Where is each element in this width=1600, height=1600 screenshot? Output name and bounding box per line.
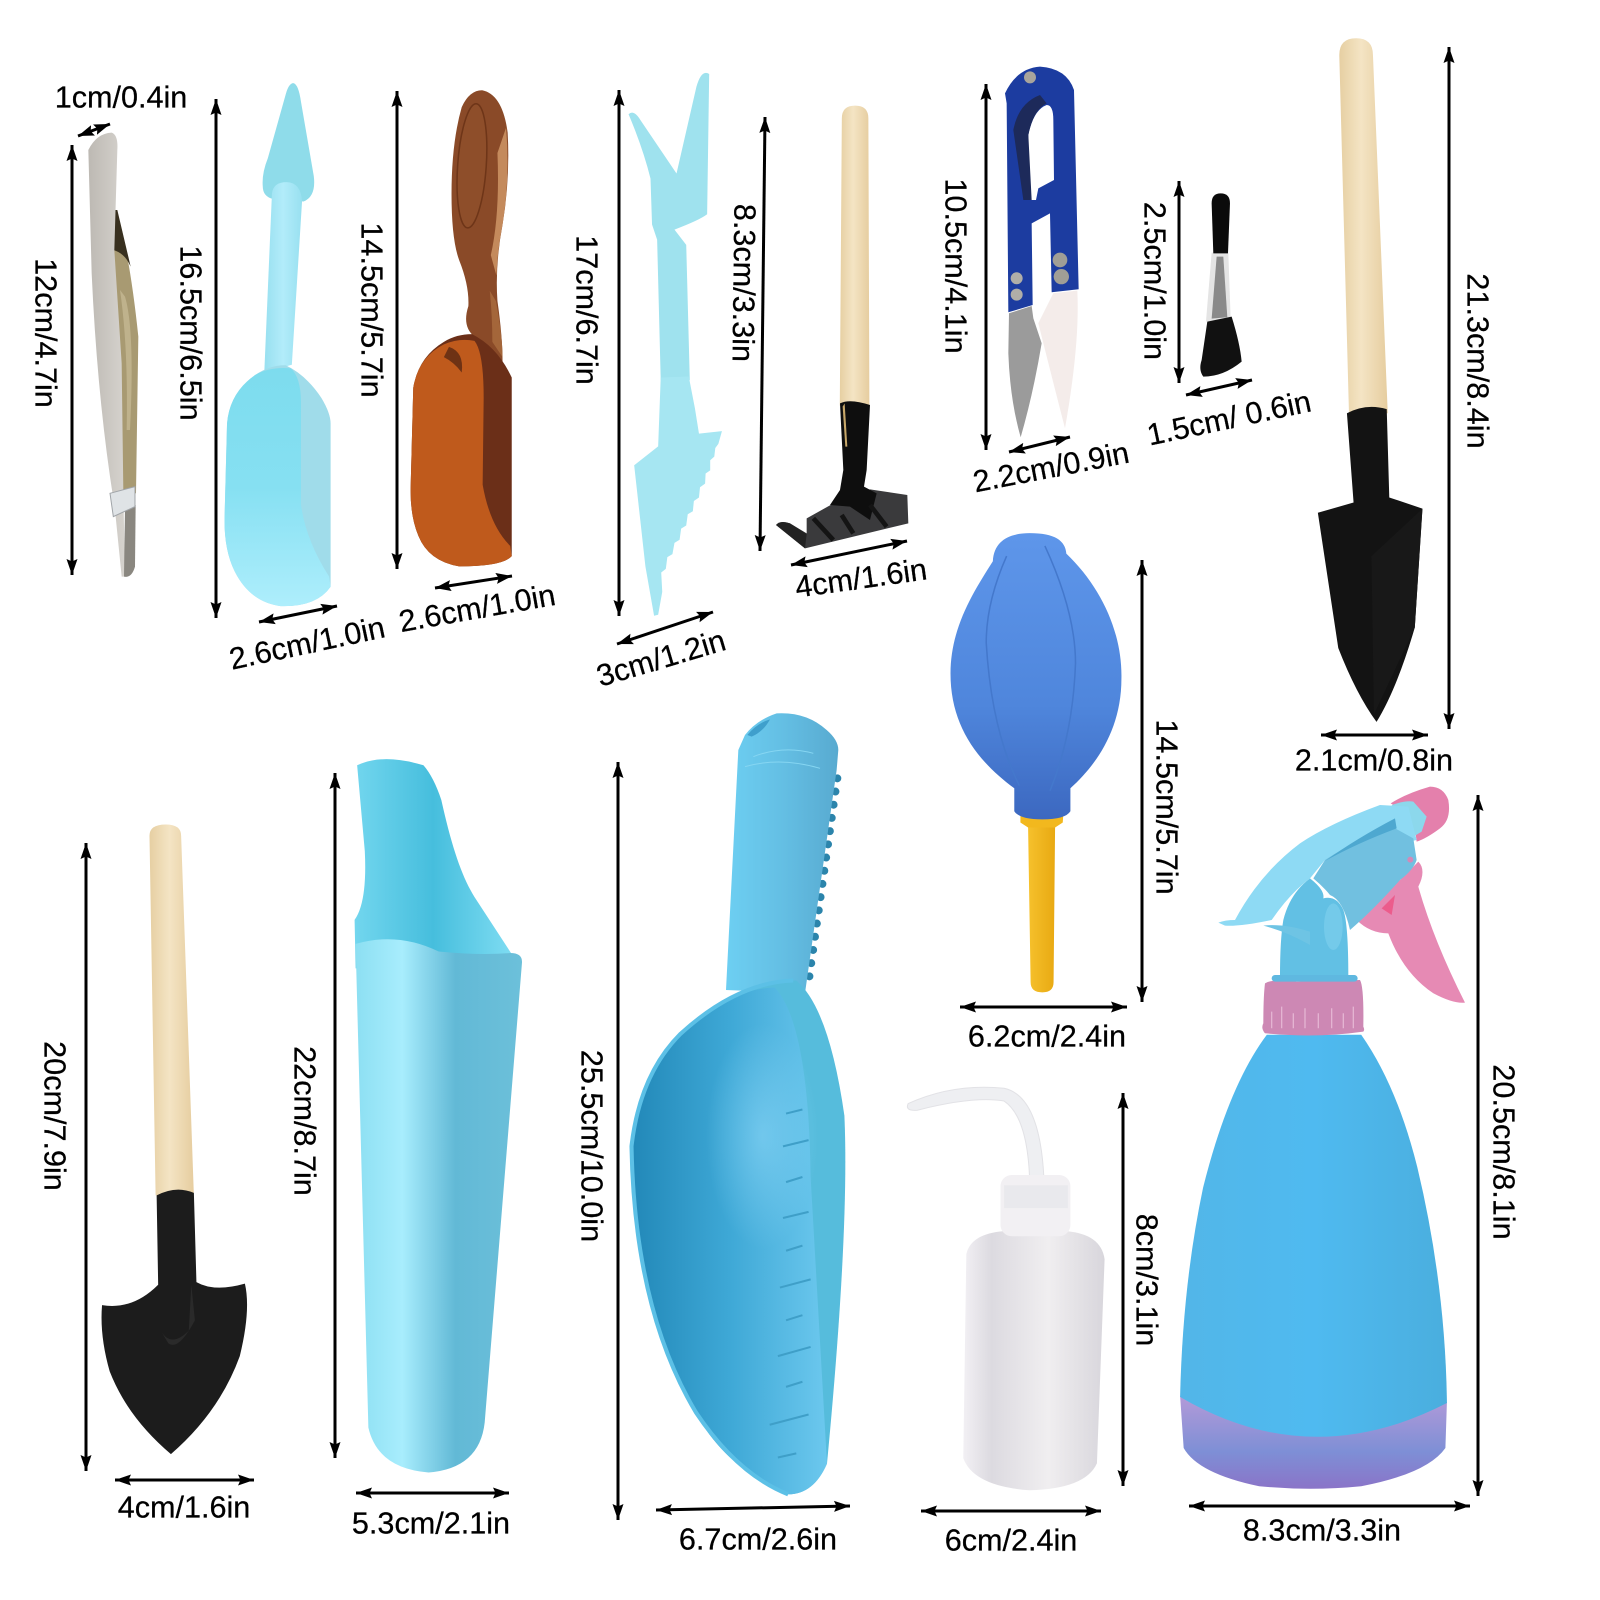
dimension: width 6.7cm <box>656 1506 850 1556</box>
dimension: width 8.3cm: 8.3cm/3.3in <box>1243 1514 1401 1548</box>
dimension: height 14.5cm: 14.5cm/5.7in <box>1150 719 1184 895</box>
panel: snips <box>938 67 1132 499</box>
panel: tall blue planting scoop <box>288 759 522 1540</box>
dimension: width 4cm: 4cm/1.6in <box>793 552 929 605</box>
icon: scoop bowl with scale marks <box>631 981 845 1494</box>
dimension: width 5.3cm: 5.3cm/2.1in <box>352 1506 510 1540</box>
panel: small light blue scoop <box>174 83 388 677</box>
dimension: height 20cm: 20cm/7.9in <box>38 1041 72 1191</box>
dimension: width 2.6cm: 2.6cm/1.0in <box>226 610 388 677</box>
icon: brown scoop <box>411 90 512 566</box>
dimension: width 6.2cm: 6.2cm/2.4in <box>968 1020 1126 1054</box>
icon: rake handle <box>840 106 869 406</box>
icon: black shovel with wooden handle <box>102 824 247 1454</box>
panel: mini rake <box>726 106 929 605</box>
icon: blue spray bottle body <box>1180 1035 1447 1489</box>
icon: blue handled thread snips <box>1005 67 1079 437</box>
icon: small black brush <box>1200 193 1242 377</box>
icon: light blue scoop <box>224 83 331 606</box>
dimension: width 3cm: 3cm/1.2in <box>593 623 730 694</box>
dimension: width 2.1cm: 2.1cm/0.8in <box>1295 744 1453 778</box>
panel: spray bottle <box>1180 787 1520 1548</box>
dimension: width 2.2cm: 2.2cm/0.9in <box>970 436 1132 499</box>
dimension: height 14.5cm: 14.5cm/5.7in <box>354 222 388 398</box>
icon: rake head <box>776 401 908 548</box>
dimension: height 16.5cm: 16.5cm/6.5in <box>174 245 208 421</box>
dimension: height 21.3cm: 21.3cm/8.4in <box>1460 273 1494 449</box>
panel: small shovel <box>38 824 254 1524</box>
dimension: width 2.6cm: 2.6cm/1.0in <box>396 578 558 639</box>
dimension: height 8.3cm <box>726 117 765 551</box>
icon: tall blue scoop <box>355 759 522 1472</box>
panel: brush <box>1138 181 1314 452</box>
panel: large measuring scoop <box>574 713 850 1556</box>
dimension: height 10.5cm: 10.5cm/4.1in <box>938 178 972 354</box>
dimension: width 6cm: 6cm/2.4in <box>945 1524 1077 1558</box>
dimension: height 8cm: 8cm/3.1in <box>1130 1214 1164 1346</box>
panel: small brown scoop <box>354 90 558 639</box>
dimension: height 17cm: 17cm/6.7in <box>570 235 604 385</box>
panel: narrow trowel <box>1295 38 1494 777</box>
dimension: height 12cm: 12cm/4.7in <box>28 258 62 408</box>
dimension: height 22cm: 22cm/8.7in <box>288 1046 322 1196</box>
panel: wash bottle <box>907 1087 1164 1558</box>
dimension: width 4cm: 4cm/1.6in <box>118 1490 250 1524</box>
dimension: width 1cm: 1cm/0.4in <box>55 80 187 114</box>
dimension: height 25.5cm: 25.5cm/10.0in <box>574 1050 608 1242</box>
icon: spray head with pink trigger and collar <box>1218 787 1465 1035</box>
dimension: height 2.5cm: 2.5cm/1.0in <box>1138 202 1172 360</box>
dimension: width 1cm <box>55 80 187 136</box>
dimension: height 20.5cm: 20.5cm/8.1in <box>1486 1064 1520 1240</box>
dimension: width 1.5cm: 1.5cm/ 0.6in <box>1144 385 1314 452</box>
icon: double-ended fork trowel <box>629 73 722 616</box>
icon: squeeze wash bottle <box>907 1087 1105 1490</box>
icon: black trowel with wooden handle <box>1318 38 1422 722</box>
icon: scoop handle with teeth <box>726 713 838 993</box>
dimension: height 8.3cm: 8.3cm/3.3in <box>726 204 761 362</box>
panel: tweezers <box>28 80 187 577</box>
icon: blue rubber blower with yellow nozzle <box>951 533 1121 992</box>
dimension: width 6.7cm: 6.7cm/2.6in <box>679 1522 837 1556</box>
panel: air blower bulb <box>951 533 1184 1054</box>
icon: tweezers <box>88 133 138 577</box>
panel: fork and serrated trowel <box>570 73 730 694</box>
